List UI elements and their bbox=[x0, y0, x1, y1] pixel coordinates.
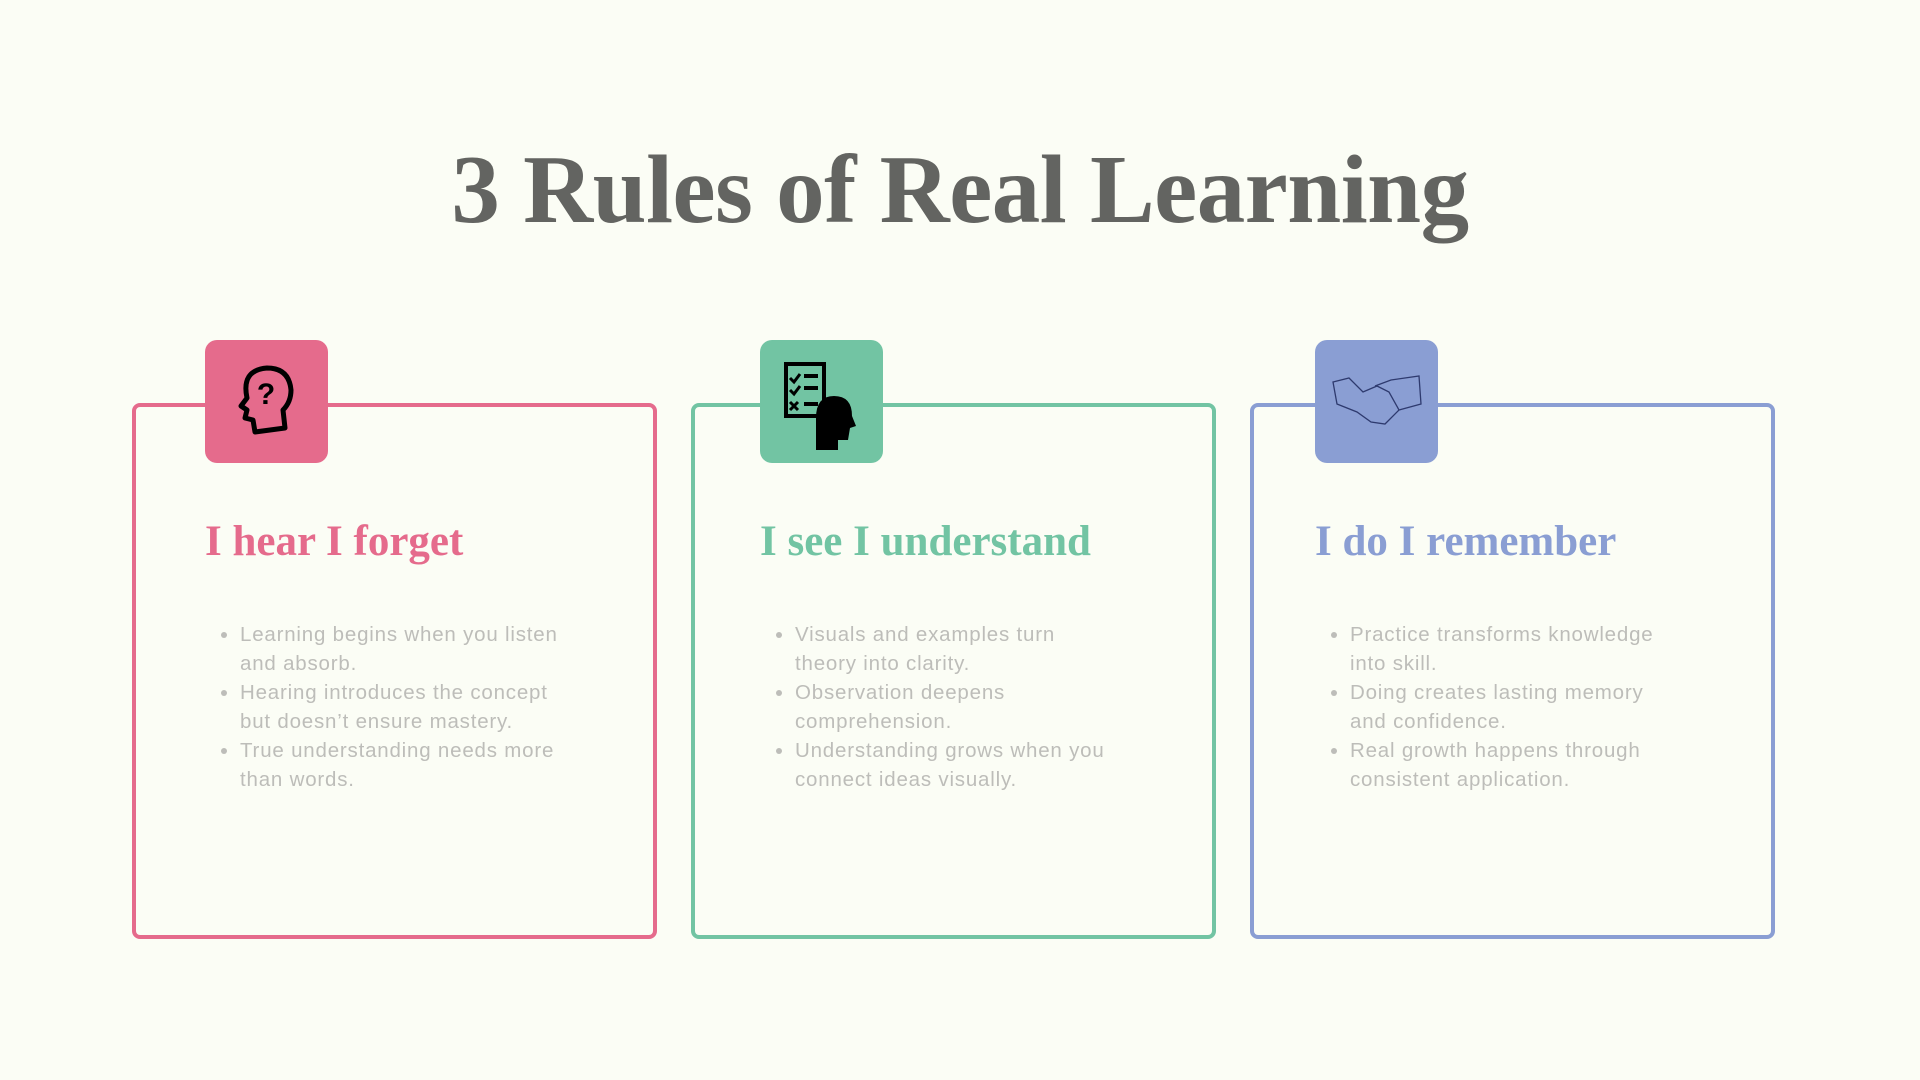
bullets: hear bbox=[221, 623, 558, 791]
icon: head question bbox=[205, 340, 328, 463]
bullets: hear: than words. bbox=[240, 768, 355, 791]
bullets: hear: but doesn’t ensure mastery. bbox=[240, 710, 513, 733]
bullets: do: and confidence. bbox=[1350, 710, 1507, 733]
bullets: see: theory into clarity. bbox=[795, 652, 970, 675]
bullets: hear: Learning begins when you listen bbox=[240, 623, 558, 646]
bullets: see: Visuals and examples turn bbox=[795, 623, 1055, 646]
bullets: hear: True understanding needs more bbox=[240, 739, 554, 762]
icon: checklist head bbox=[760, 340, 883, 463]
bullets: hear: Hearing introduces the concept bbox=[240, 681, 548, 704]
icon: head question: ? bbox=[257, 378, 275, 411]
panel: see bbox=[691, 403, 1216, 939]
heading: do: I do I remember bbox=[1315, 518, 1616, 565]
bullets: see: Understanding grows when you bbox=[795, 739, 1105, 762]
bullets: see: Observation deepens bbox=[795, 681, 1005, 704]
bullets: do bbox=[1331, 623, 1653, 791]
heading: hear: I hear I forget bbox=[205, 518, 463, 565]
title: 3 Rules of Real Learning bbox=[451, 136, 1469, 243]
bullets: do: Real growth happens through bbox=[1350, 739, 1641, 762]
bullets: do: Practice transforms knowledge bbox=[1350, 623, 1653, 646]
bullets: do: consistent application. bbox=[1350, 768, 1570, 791]
icon: handshake bbox=[1315, 340, 1438, 463]
bullets: see bbox=[776, 623, 1105, 791]
bullets: do: Doing creates lasting memory bbox=[1350, 681, 1644, 704]
bullets: hear: and absorb. bbox=[240, 652, 357, 675]
bullets: see: connect ideas visually. bbox=[795, 768, 1017, 791]
bullets: see: comprehension. bbox=[795, 710, 952, 733]
panel: hear bbox=[132, 403, 657, 939]
heading: see: I see I understand bbox=[760, 518, 1091, 565]
bullets: do: into skill. bbox=[1350, 652, 1437, 675]
panel: do bbox=[1250, 403, 1775, 939]
